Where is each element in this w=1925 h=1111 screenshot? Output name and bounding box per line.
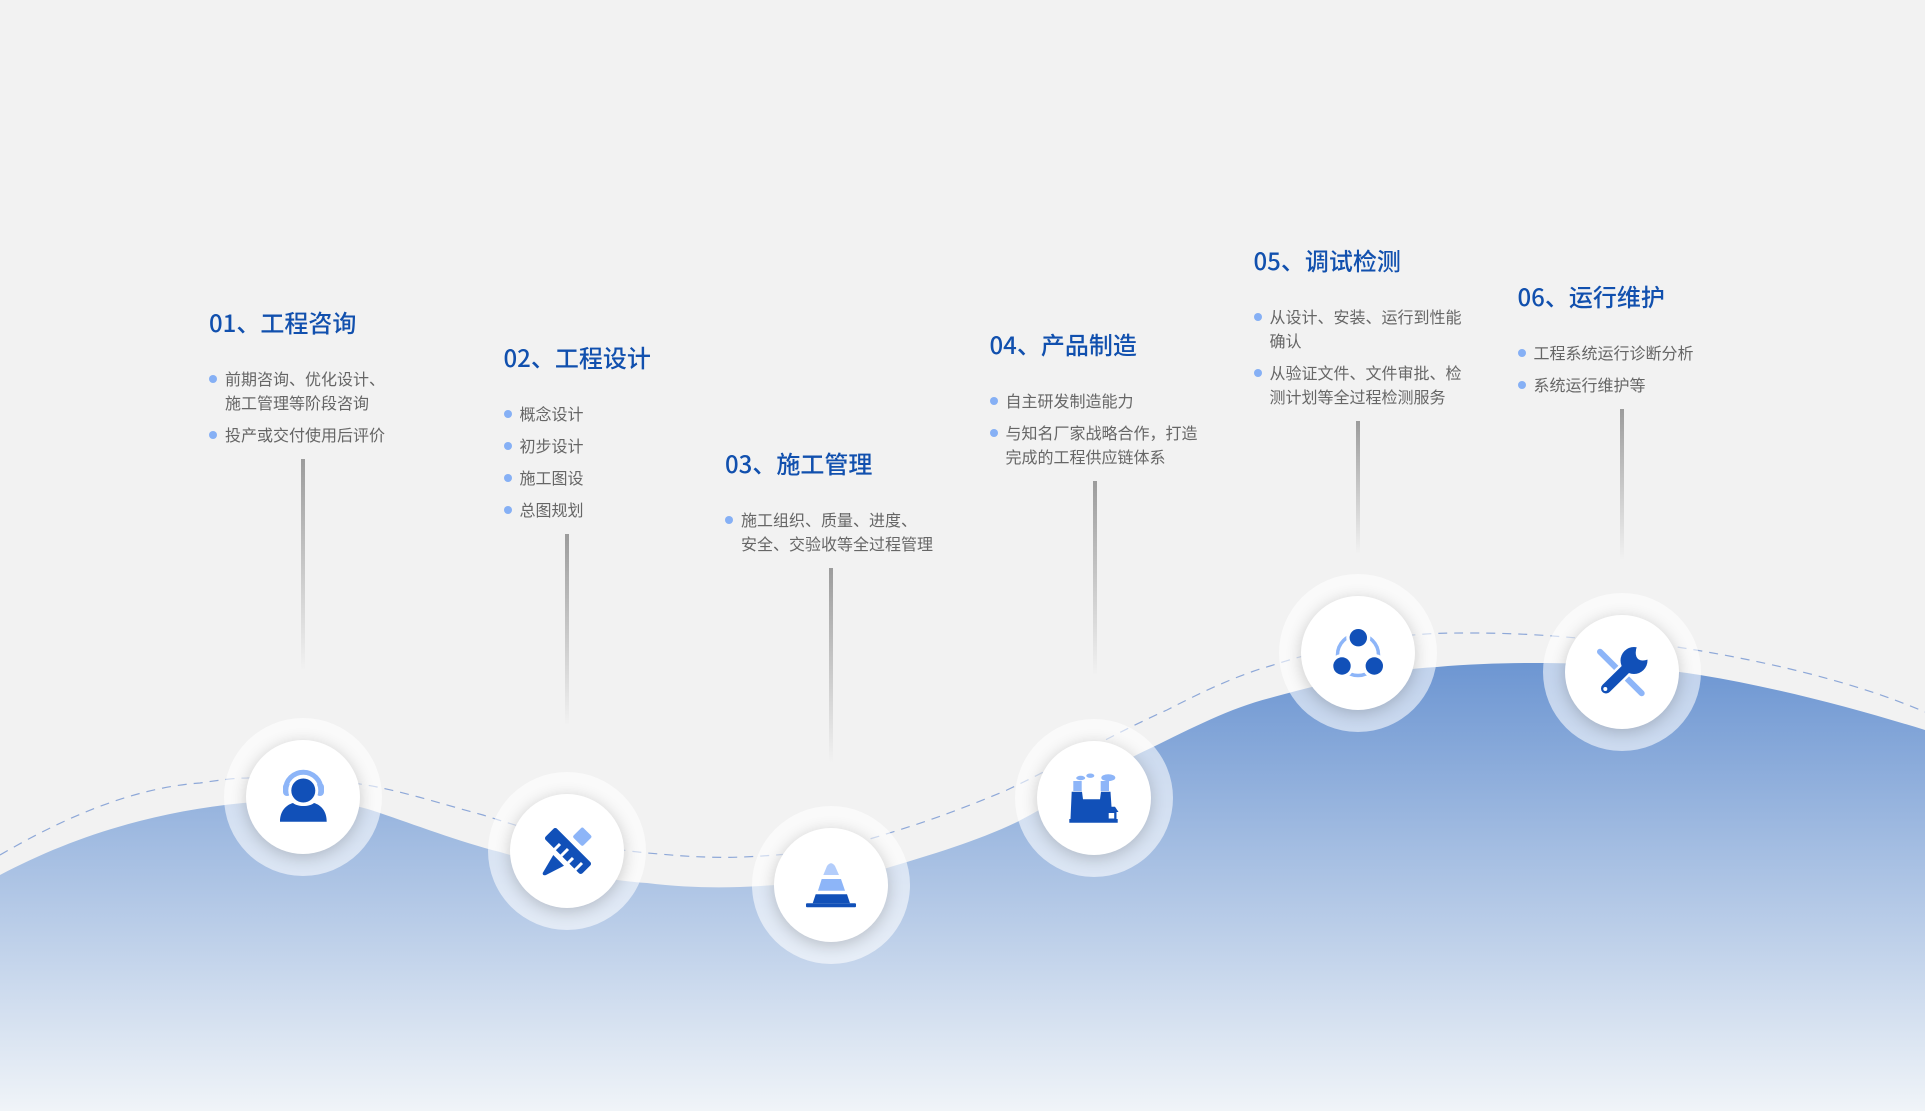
connector 2 — [565, 534, 569, 726]
bullet text: 前期咨询、优化设计、 — [225, 366, 385, 390]
heading 06: 06、运行维护 — [1518, 278, 1665, 313]
bullet text — [209, 366, 385, 414]
bullet text: 安全、交验收等全过程管理 — [741, 531, 933, 555]
heading 03: 03、施工管理 — [725, 445, 872, 480]
bullet text: 投产或交付使用后评价 — [225, 422, 385, 446]
panel: 04 product manufacturing — [990, 326, 1198, 468]
bullet text: 完成的工程供应链体系 — [1006, 444, 1166, 468]
bullet text: 概念设计 — [520, 401, 584, 425]
connector 6 — [1620, 409, 1624, 560]
panel: 06 operation and maintenance — [1518, 278, 1694, 396]
icon node 3: traffic cone — [752, 806, 910, 964]
bullet text: 从设计、安装、运行到性能 — [1270, 304, 1462, 328]
bullet text: 测计划等全过程检测服务 — [1270, 384, 1446, 408]
icon node 4: factory — [1015, 719, 1173, 877]
bullet text: 从验证文件、文件审批、检 — [1270, 360, 1462, 384]
connector 1 — [301, 459, 305, 671]
heading 04: 04、产品制造 — [990, 326, 1137, 361]
heading 01: 01、工程咨询 — [209, 304, 356, 339]
panel: 01 engineering consulting — [209, 304, 385, 446]
heading 05: 05、调试检测 — [1254, 242, 1401, 277]
heading 02: 02、工程设计 — [504, 339, 651, 374]
bullet text — [1254, 360, 1462, 408]
icon node 6: wrench and screwdriver — [1543, 593, 1701, 751]
bullet text: 自主研发制造能力 — [1006, 388, 1134, 412]
bullet text: 工程系统运行诊断分析 — [1534, 340, 1694, 364]
icon node 5: three linked circles — [1279, 574, 1437, 732]
icon node 1: headset person — [224, 718, 382, 876]
panel: 03 construction management — [725, 445, 933, 555]
connector 5 — [1356, 421, 1360, 554]
bullet text: 与知名厂家战略合作，打造 — [1006, 420, 1198, 444]
bullet text: 初步设计 — [520, 433, 584, 457]
panel: 05 commissioning and testing — [1254, 242, 1462, 408]
bullet text: 总图规划 — [520, 497, 584, 521]
bullet text: 施工组织、质量、进度、 — [741, 507, 917, 531]
panel: 02 engineering design — [504, 339, 651, 521]
bullet text — [990, 420, 1198, 468]
bullet text: 施工图设 — [520, 465, 584, 489]
bullet text: 确认 — [1270, 328, 1302, 352]
bullet text — [1254, 304, 1462, 352]
connector 3 — [829, 568, 833, 763]
icon node 2: ruler and pencil — [488, 772, 646, 930]
bullet text: 施工管理等阶段咨询 — [225, 390, 369, 414]
bullet text: 系统运行维护等 — [1534, 372, 1646, 396]
bullet text — [725, 507, 933, 555]
connector 4 — [1093, 481, 1097, 676]
